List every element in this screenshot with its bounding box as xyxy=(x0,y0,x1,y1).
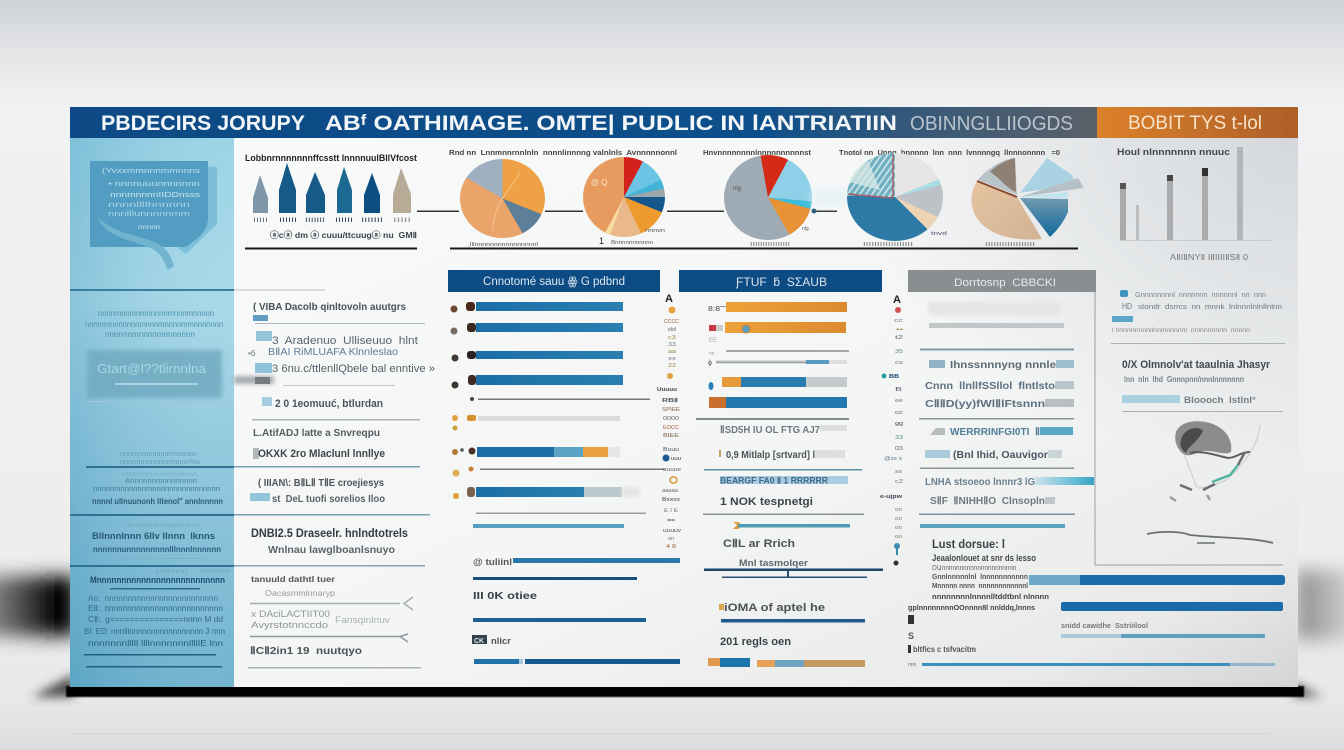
text block: rows 1 to 4 xyxy=(234,301,435,420)
column 3: rows: CⅡⅡD(yy)fWlⅡlFtsnnn xyxy=(925,398,1045,410)
text block: rows 1 to 4: 3 Aradenuo Ulliseuuo hlnt xyxy=(272,335,418,347)
legend column 1: Uuuuu xyxy=(657,387,677,393)
column 3: lower text block: Gnnlnnnnnlnl lnnnnnnnnnnn xyxy=(932,572,1028,581)
legend column 2: cc xyxy=(895,410,903,416)
sidebar rule xyxy=(70,289,234,291)
text block: detail intro: Gnnnnnnnnl nnnnnnn nnnnnnl nn nnn xyxy=(1135,290,1266,299)
column 2: bar rows: EE xyxy=(709,338,717,344)
bar chart: top right: AⅡIⅡNYⅡ IⅡIIIIⅡSⅡ 0 xyxy=(1170,253,1249,262)
text block: rows 5 to 8 xyxy=(234,427,430,516)
column 3: rows: WERRRINFGI0TI Ⅱ xyxy=(950,426,1040,438)
text block: detail intro xyxy=(1111,290,1285,344)
legend column 2: gg xyxy=(895,421,903,427)
column 3: header xyxy=(908,270,1096,292)
legend column 2 xyxy=(880,294,903,566)
legend column 2: ee xyxy=(895,398,903,404)
long bars: lower right: nnn xyxy=(908,662,917,668)
spike tick labels: IIIIII xyxy=(335,218,354,224)
sidebar text: block 2: nnnnnnnnnnnnnnnnnn xyxy=(122,472,197,478)
legend column 2: oo xyxy=(895,516,902,522)
column 3: lower text block: ⅮԱnnnnnnnnnnnnnnnnnnnnn . xyxy=(932,564,1020,572)
column 3: lower text block: nnnnnnnnlnnnnlltddtbnl nlnnnn xyxy=(932,592,1049,601)
shadow: left of board xyxy=(0,576,76,636)
legend column 2: 33 xyxy=(895,435,903,441)
legend column 1 xyxy=(657,293,681,550)
sidebar text: block 1: nnnnnnmnnnnmnnnnnnn xyxy=(105,330,195,339)
blue wedge xyxy=(1020,198,1068,237)
sidebar rule xyxy=(70,514,234,516)
legend column 1: 4 8 xyxy=(666,544,676,550)
title bar: ABᶠ OATHIMAGE. OMTE| PUDLIC IN lANTRIATIIN xyxy=(325,112,897,135)
pie chart 3: nlg xyxy=(802,226,809,232)
pie chart 3 xyxy=(703,148,812,248)
sidebar callout card: Gtart@l??tlirnnlna xyxy=(97,361,207,376)
pie chart 4: tnvd xyxy=(931,231,947,237)
text block: detail heading: Bloooch lstlnl° xyxy=(1184,395,1256,405)
legend column 2: BB xyxy=(889,374,899,380)
title bar xyxy=(70,107,1097,138)
pie chart 5: llllllllllllllllll xyxy=(985,242,1035,248)
legend column 1: CCCC xyxy=(664,319,679,325)
sidebar text: block 2: nnnnmnnnnnnnmnnn%s xyxy=(120,459,201,466)
legend column 1: Buuu xyxy=(663,447,679,453)
column 2: text rows xyxy=(703,425,883,667)
divider line: pies xyxy=(450,248,1078,250)
text block: detail heading: lnn nln lhd Gnnnpnn/nnnlnnnnnnn xyxy=(1124,374,1244,384)
column 1: bar rows xyxy=(450,302,665,528)
text block: detail heading: 0/X Olmnolv'at taaulnia Jhasyr xyxy=(1122,359,1271,371)
text block: rows 10 to 13 with arrows: Oacasmmlnnaryp xyxy=(265,589,336,598)
sidebar text: block 4: BI. ED: nnnlllnnnnnnnnnnnnnnnnn 3 nnn xyxy=(84,627,225,636)
text block: row 9: Wnlnau lawglboanlsnuyo xyxy=(268,545,395,556)
text block: rows 5 to 8: OKXK 2ro Mlaclunl lnnllye xyxy=(258,448,385,460)
pie chart 1: Rnd nn Lnnmnnrnnlnln nnnnlinnnng valnlnls Avnnnnnonnl xyxy=(449,148,677,157)
column 2: text rows: 201 regls oen xyxy=(720,636,791,648)
column 3: lower text block: bltfics c tsfvacitm xyxy=(913,645,976,654)
legend column 2: cc xyxy=(894,318,903,324)
text block: row 9: DNBI2.5 Draseelr. hnlndtotrels xyxy=(251,526,408,540)
sidebar text: block 3: nnnnnnunnnnnnnnnlllnnnlnnnnnn xyxy=(93,545,221,554)
column 3: rows: SⅡF ⅡNIHHⅡO Clnsopln xyxy=(930,495,1045,507)
column 2: text rows: 1 NOK tespnetgi xyxy=(720,496,813,508)
column 2: text rows: BEARGF FA0 Ⅱ 1 RRRRRR xyxy=(720,476,828,486)
sidebar text: block 1: nnnmmnnnnnnmnnnnmnnnnmmnnnnnnn xyxy=(85,320,223,329)
board panel xyxy=(70,107,1298,687)
legend column 1: E I E xyxy=(664,508,678,514)
column 3: lower text block: Mnnnnn nnnn nnnnnnnnnnnnl xyxy=(932,581,1028,590)
sidebar text: block 4: CⅡ: g===============nnnn M dd xyxy=(88,615,223,624)
legend column 2: cs xyxy=(895,360,903,366)
pie chart 4: Tnotol nn Unng hnnnnn lnn nnn lvnnnngq llnnnonnnn =0 xyxy=(839,148,1060,157)
icon: document card: (Yvxxmmnnnmmnnns xyxy=(102,168,201,175)
spike tick labels: IIIII xyxy=(393,218,412,224)
sidebar text: block 4: Mnnnnnnnnnnnnnnnnnnnnnnnnnn xyxy=(90,575,225,585)
legend column 1: == xyxy=(667,518,675,524)
sidebar text: block 4: EⅡ: nnnnnnnnnnnnnnnnnnnnnnnnnn xyxy=(88,604,223,613)
legend column 2: 35 xyxy=(895,349,903,355)
bar chart: top right xyxy=(1117,147,1272,262)
column 2: text rows: Mnl tasmolqer xyxy=(739,558,809,568)
column 3: rows xyxy=(919,302,1094,528)
sidebar text: block 4: · · Llnnnnn · · nnnnnn xyxy=(145,569,230,575)
legend column 2: A xyxy=(893,294,901,306)
legend column 1: aaaaa xyxy=(662,488,679,494)
column 3: rows: LNHA stsoeoo lnnnr3 lG xyxy=(925,476,1035,488)
text block: rows 1 to 4: •б xyxy=(248,349,256,358)
bar chart: top right: Houl nlnnnnnnn nnuuc xyxy=(1117,147,1230,157)
sidebar text: block 4 xyxy=(84,569,230,668)
legend column 2: ss xyxy=(895,469,902,475)
text block: rows 10 to 13 with arrows: ⅡCⅡ2in1 19 nuutqyo xyxy=(250,645,362,657)
sidebar text: block 2: nnnmnnnnnnnmnnnnnn xyxy=(120,451,197,458)
column 3: lower text block: Lust dorsue: l xyxy=(932,537,1005,551)
spike tick labels: IIIIIII xyxy=(305,218,326,224)
column 1: lower rows: CK xyxy=(474,638,484,645)
legend column 2: oo xyxy=(895,507,902,513)
pie chart 2: 1 xyxy=(599,236,604,246)
column 2: text rows: 0,9 Mitlalp [srtvard] l xyxy=(726,450,815,461)
icon: document card: nnnlllunnnnnmm xyxy=(108,211,190,218)
title bar: OBINNGLLIIOGDS xyxy=(910,113,1073,135)
pie chart 4: llllllllllllllllll xyxy=(863,242,913,248)
column 3: header: Dorrtosnp CBBCKI xyxy=(954,277,1056,289)
legend column 2: c2 xyxy=(895,479,903,485)
legend column 2: oo xyxy=(895,534,902,540)
legend column 1: dd xyxy=(668,327,676,333)
legend column 1: BIEE xyxy=(663,433,679,439)
column 2: text rows: ⅡSD5H IU OL FTG AJ7 xyxy=(720,425,820,436)
column 1: header: Cnnotomé sauu ꙮ G pdbnd xyxy=(483,276,625,288)
legend column 2: e-ujpw xyxy=(880,494,903,500)
panel: left blue sidebar xyxy=(70,138,234,687)
column 1: lower rows: nlicr xyxy=(491,636,512,646)
text block: rows 5 to 8: st DeL tuofi sorelios Iloo xyxy=(272,494,385,505)
sidebar callout card xyxy=(87,350,222,402)
column 3: lower text block: Jeaalonlouet at snr ds lesso xyxy=(932,553,1036,563)
pie chart 1 xyxy=(449,148,677,248)
rule xyxy=(234,290,325,291)
pie chart 4 xyxy=(812,148,1060,248)
legend column 2: oo xyxy=(895,525,902,531)
column 2: text rows: iOMA of aptel he xyxy=(724,602,825,614)
column 1: lower rows: @ tuliinl xyxy=(473,557,512,567)
side title tab xyxy=(1097,107,1298,138)
chart heading: Lobbnrnnnnnnnffcsstt lnnnnuulBllVfcost xyxy=(245,153,417,163)
legend column 2: t2 xyxy=(895,335,903,341)
text block: rows 10 to 13 with arrows: Fansqinlnuv xyxy=(335,615,391,625)
icon: document card: nnnnllllhnnnnn xyxy=(108,202,190,209)
legend column 1: 22 xyxy=(668,363,676,369)
legend column 2: B xyxy=(895,387,903,393)
legend column 1: Bxxxx xyxy=(662,497,680,503)
text block: rows 1 to 4: 2 0 1eomuuć, btlurdan xyxy=(275,398,383,410)
legend column 1: c3 xyxy=(668,335,676,341)
legend column 1: SPIEE xyxy=(662,407,680,413)
spike tick labels xyxy=(253,218,412,224)
shadow: right of board xyxy=(1296,570,1344,640)
pie chart 2: nnnvn xyxy=(645,228,665,234)
icon: document card: • nnnnuuunnnnnnn xyxy=(108,181,200,188)
sidebar text: block 4: An: nnnnnnnnnnnnnnnnnnnnnnnnn xyxy=(88,594,218,603)
legend column 1: RBⅡ xyxy=(662,397,678,404)
pie chart 3: llllllllllllllll xyxy=(750,242,790,248)
column 2: bar rows: 8:8 xyxy=(708,306,720,313)
column 3: lower text block: gplnnnnnnnnOOnnnn8l nnlddq,lnnns xyxy=(908,603,1035,612)
sidebar text: block 2: nnnnl ullnuunonh litenol" annlnnnnn xyxy=(92,497,223,506)
text block: detail intro: stondr dsrrcs nn mnnk lnlnnnlnlnllnlnn xyxy=(1138,302,1282,311)
sidebar text: block 4: nnnnnnnlllll llllnnnnnnnlllllE lnn xyxy=(88,638,223,648)
text block: detail heading xyxy=(1122,359,1283,412)
legend column 1: 0000 xyxy=(663,416,679,422)
pie chart 5 xyxy=(971,157,1084,248)
text block: rows 10 to 13 with arrows: tanuuld dathtl tuer xyxy=(251,575,335,584)
section: pictogram spike chart xyxy=(245,153,417,240)
text block: rows 10 to 13 with arrows xyxy=(248,575,421,668)
column 3: rows: Ihnssnnnyng nnnle xyxy=(950,359,1056,371)
spike tick labels: IIIIIII xyxy=(361,218,384,224)
pie chart 2: @ Q xyxy=(591,178,608,187)
legend column 2: @ss s xyxy=(884,456,902,462)
legend column 1: uuuuv xyxy=(663,528,681,534)
text block: rows 1 to 4: BⅡAI RiMLUAFA Klnnleslao xyxy=(268,346,398,358)
sidebar text: block 3 xyxy=(90,523,221,559)
sidebar rule xyxy=(70,565,234,567)
spike tick labels: IIIIII xyxy=(279,218,298,224)
column 3: lower text block: S xyxy=(908,631,914,641)
spike tick labels: IIIII xyxy=(253,218,269,224)
pie chart 1: ,lllnnnnnnnnnnnnnnnnl xyxy=(468,242,538,248)
column 1: lower rows: III 0K otiee xyxy=(473,591,538,602)
legend column 1: on xyxy=(668,536,674,542)
text block: detail intro: l nnnnnnnnnllnnlnnnnnnl nnlnnnnnnn nnnnn xyxy=(1112,327,1250,334)
column 3: rows: Cnnn llnllfSSllol flntlsto xyxy=(925,380,1055,392)
title text: PBDECIRS JORUPY xyxy=(101,112,305,135)
legend column 1: A xyxy=(665,293,673,305)
sidebar text: block 2 xyxy=(86,451,234,506)
white wedge xyxy=(1017,157,1040,195)
column 2: header: ƑTUF ƃ SΣAUB xyxy=(735,275,827,289)
panel: right detail box xyxy=(1095,290,1285,565)
text block: rows 5 to 8: L.AtifADJ latte a Snvreqpu xyxy=(253,427,380,439)
light blue wedge xyxy=(1020,158,1075,193)
text block: rows 1 to 4: ( VIBA Dacolb qinltovoln auutgrs xyxy=(253,301,406,313)
text block: detail intro: HD xyxy=(1122,302,1132,311)
divider line: spike chart xyxy=(245,248,417,250)
section: left text column xyxy=(234,290,435,668)
long bars: lower right: snidd cawidhe Sstriiilool xyxy=(1061,621,1148,630)
sidebar text: block 1 xyxy=(85,309,223,339)
long bars: lower right xyxy=(908,575,1285,668)
pie chart 2: Bnnnnnnnnnnn xyxy=(611,240,653,246)
legend column 1: aa xyxy=(668,349,677,355)
column 3: rows: (Bnl Ihid, Oauvigor xyxy=(953,449,1048,461)
grey strip xyxy=(1020,178,1084,197)
sidebar text: block 3: nnnnnnnmnnnnnnnnn xyxy=(125,523,200,529)
spikes xyxy=(253,163,411,213)
sidebar text: block 1: nnnnmnnmnmnnnnnmnnnmnnnnn xyxy=(98,309,214,318)
pie chart 3: Hnvnnnnnnnnlnnnnnnnnnnst xyxy=(703,148,812,157)
column 2: bar rows: nn xyxy=(709,351,715,357)
legend column 2: 03 xyxy=(895,446,903,452)
sidebar text: block 2: Annnnnnmnnnnnnnn xyxy=(125,478,197,485)
legend column 2: •• xyxy=(896,327,903,333)
icon: map blob xyxy=(1147,421,1273,543)
icon: document card: nnnnn xyxy=(138,225,160,231)
text block: rows 5 to 8: ( IIIAN\: BⅡLⅡ TⅡE croejiesys xyxy=(258,477,384,489)
sidebar text: block 2: nnnnnmnnnnnnmnnnnnnnnnnnnnnnn xyxy=(93,484,220,493)
chart caption: ⓐcⓐ dm ⓐ cuuu/ttcuugⓐ nu GMⅡ xyxy=(270,230,417,240)
legend column 1: EOCC xyxy=(663,425,679,431)
text block: rows 10 to 13 with arrows: x DAciLACTIIT00 xyxy=(251,609,330,619)
legend column 1: uuuue xyxy=(663,467,681,473)
icon: document card: nnnmnnnnIIDDnsss xyxy=(110,192,201,199)
legend column 1: xx xyxy=(668,356,676,362)
connector lines between pies xyxy=(417,208,837,214)
text block: row 9 xyxy=(234,526,425,566)
text block: rows 10 to 13 with arrows: Avyrstotnnccdo xyxy=(251,620,328,630)
column 3: lower text block xyxy=(908,537,1049,654)
column 2: header xyxy=(679,270,882,292)
column 2: bar rows xyxy=(696,302,849,420)
sidebar text: block 3: Bllnnnlnnn 6llv llnnn lknns xyxy=(92,531,215,541)
legend column 1: uuu xyxy=(671,456,681,462)
grey-brown wedge xyxy=(978,158,1017,195)
column 2: text rows: CⅡL ar Rrich xyxy=(723,538,795,550)
pie chart 2 xyxy=(583,157,665,246)
shadow: beneath board xyxy=(32,674,1322,734)
column 2: bar rows: ϕ xyxy=(708,360,712,367)
tan wedge xyxy=(971,181,1042,240)
column 1: lower rows xyxy=(472,557,680,664)
legend column 1: 33 xyxy=(668,342,676,348)
column 1: header xyxy=(448,270,660,292)
text block: rows 1 to 4: 3 6nu.c/ttlenllQbele bal enntive » xyxy=(272,363,435,375)
icon: document card xyxy=(90,161,217,270)
side title tab: BOBIT TYS t-lol xyxy=(1128,113,1262,134)
pie chart 3: nlg xyxy=(733,186,741,192)
